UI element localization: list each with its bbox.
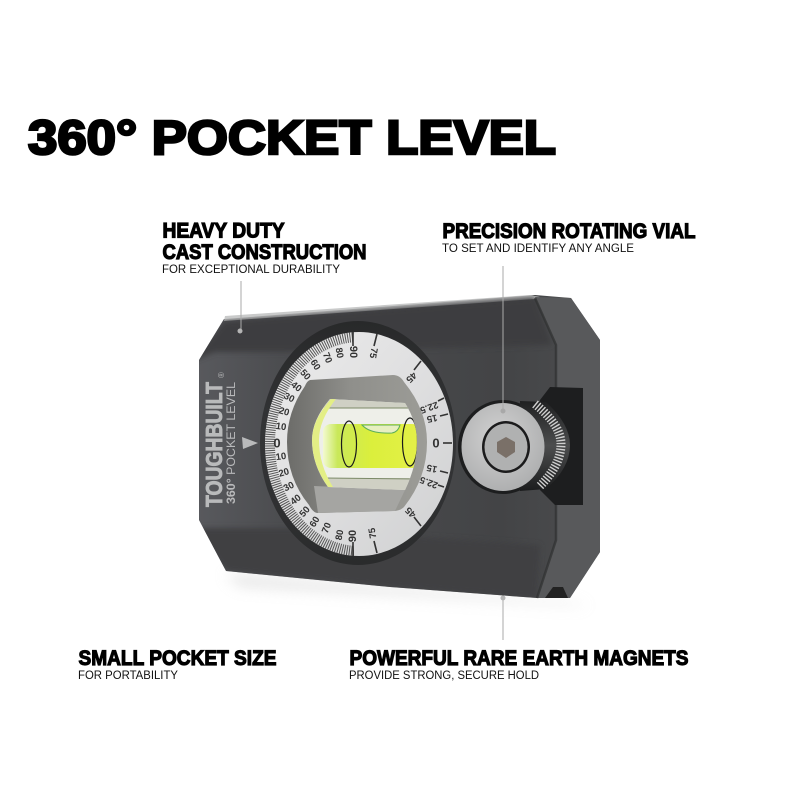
- brand marking: ®: [217, 372, 226, 378]
- leader line: cast construction: [238, 281, 242, 334]
- callout: powerful rare earth magnets: [349, 646, 688, 682]
- knob recess: [458, 400, 548, 494]
- dial right scale numbers and ticks: 22.5: [418, 473, 440, 490]
- callout: heavy duty cast construction: [162, 218, 366, 276]
- dial right scale numbers and ticks: 75: [367, 526, 379, 539]
- dial left scale numbers: 90: [347, 530, 359, 542]
- dial left scale numbers: 90: [347, 346, 359, 358]
- callout: powerful rare earth magnets: POWERFUL RARE EARTH MAGNETS: [350, 646, 688, 670]
- dial minor ticks: [265, 332, 354, 556]
- right block: [535, 297, 600, 598]
- dial right scale numbers and ticks: 0: [432, 436, 440, 450]
- base notch: [545, 587, 568, 598]
- callout: precision rotating vial: TO SET AND IDENTIFY ANY ANGLE: [442, 243, 634, 255]
- dial left scale numbers: 30: [282, 480, 296, 494]
- callout: small pocket size: SMALL POCKET SIZE: [78, 646, 276, 670]
- knob roller: [520, 401, 570, 491]
- dial right scale numbers and ticks: 45: [403, 504, 419, 520]
- dial left scale numbers: 80: [333, 347, 345, 359]
- dial left scale numbers: 60: [308, 515, 322, 529]
- dial rim: [260, 321, 456, 565]
- dial: [260, 321, 456, 565]
- callout: small pocket size: [78, 646, 276, 682]
- dial face: [265, 332, 453, 556]
- dial left scale numbers: 80: [334, 529, 346, 541]
- side notch: [540, 387, 583, 505]
- leader line: magnets: [500, 596, 506, 640]
- right block shadow edge: [535, 298, 556, 598]
- dial left scale numbers: 60: [308, 358, 322, 372]
- knob knurl: [535, 404, 561, 486]
- dial left scale numbers: 70: [320, 521, 334, 535]
- dial right scale numbers and ticks: 75: [367, 347, 379, 360]
- lower window shade: [314, 486, 405, 513]
- knob inner ring: [482, 421, 530, 473]
- dial left scale numbers: 10: [275, 451, 287, 463]
- dial left scale numbers: 20: [277, 466, 291, 480]
- brand marking: TOUGHBUILT: [201, 382, 227, 507]
- dial right scale numbers and ticks: 15: [425, 412, 438, 425]
- pocket level device: [190, 295, 600, 606]
- dial right scale numbers and ticks: 45: [403, 369, 419, 385]
- brand marking: [201, 372, 238, 507]
- body casting: [199, 295, 600, 598]
- dial left scale numbers: 10: [275, 421, 287, 433]
- callout: heavy duty cast construction: CAST CONSTRUCTION: [162, 240, 366, 264]
- dial right scale numbers and ticks: 22.5: [418, 399, 440, 416]
- dial left scale numbers: 70: [320, 351, 334, 365]
- dial left scale numbers: 30: [282, 391, 296, 405]
- dial left scale numbers: 0: [273, 436, 281, 450]
- dial right scale numbers and ticks: 15: [425, 461, 438, 474]
- lower facet: [190, 528, 540, 598]
- dial left scale numbers: 40: [288, 492, 304, 508]
- dial left scale numbers: 50: [297, 504, 313, 520]
- zero pointer: [242, 437, 258, 449]
- callout: precision rotating vial: PRECISION ROTATING VIAL: [442, 219, 696, 243]
- callout: heavy duty cast construction: FOR EXCEPTIONAL DURABILITY: [162, 264, 340, 276]
- rotating knob: [458, 400, 570, 494]
- upper facet: [190, 297, 552, 362]
- callout: heavy duty cast construction: HEAVY DUTY: [162, 218, 284, 242]
- callout: powerful rare earth magnets: PROVIDE STRONG, SECURE HOLD: [349, 670, 539, 682]
- callout: precision rotating vial: [442, 219, 696, 255]
- ground shadow: [225, 574, 590, 606]
- callout: small pocket size: FOR PORTABILITY: [78, 670, 178, 682]
- top silver edge: [224, 295, 540, 321]
- dial left scale numbers: [273, 346, 359, 542]
- knob bolt: [484, 424, 528, 470]
- vial glass: [312, 399, 417, 490]
- vial contents: [310, 397, 420, 490]
- dial left scale numbers: 40: [288, 379, 304, 395]
- title: 360° POCKET LEVEL: [28, 112, 556, 165]
- dial left scale numbers: 20: [277, 405, 291, 419]
- dial left scale numbers: 50: [297, 367, 313, 383]
- brand marking: 360° POCKET LEVEL: [224, 382, 238, 504]
- hex socket: [497, 437, 515, 458]
- knob face: [462, 403, 544, 491]
- window surround: [287, 375, 427, 513]
- vial window: [287, 375, 427, 513]
- leader line: rotating vial: [500, 266, 506, 414]
- dial right scale numbers and ticks: [353, 332, 452, 556]
